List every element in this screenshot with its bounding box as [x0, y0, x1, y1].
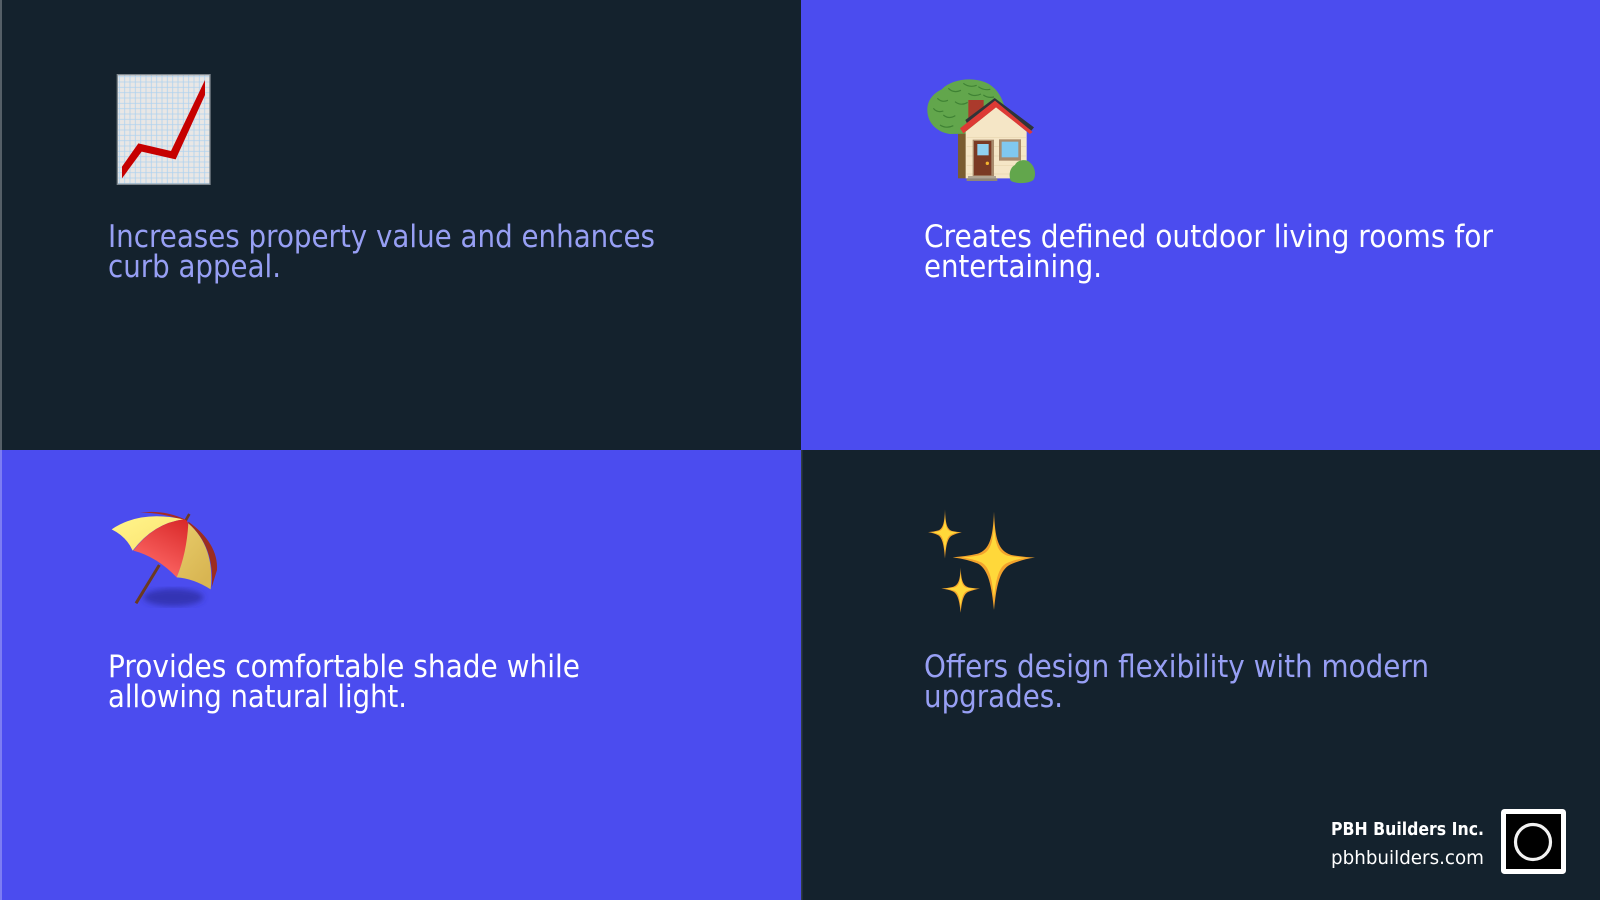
text: property value benefit: curb appeal.	[108, 249, 281, 285]
bush	[1010, 160, 1035, 183]
text: property value benefit: Increases property value and enhances	[108, 219, 655, 255]
text: shade benefit: Provides comfortable shade while	[108, 649, 580, 685]
icon: beach umbrella	[112, 512, 217, 606]
tree crown	[927, 79, 1004, 134]
panel: design flexibility	[801, 450, 1600, 900]
panel: outdoor living rooms	[801, 0, 1600, 450]
icon: sparkles	[928, 509, 1035, 613]
icon: chart with upward trend	[117, 74, 211, 185]
text: shade benefit: allowing natural light.	[108, 679, 407, 715]
panel: property value	[0, 0, 801, 450]
text: design flexibility benefit: upgrades.	[924, 679, 1063, 715]
footer: company name and website: PBH Builders Inc.	[1331, 819, 1484, 840]
footer: company name and website: pbhbuilders.com	[1331, 847, 1484, 869]
text: design flexibility benefit	[924, 649, 1429, 715]
footer: company name and website	[1331, 819, 1484, 869]
panel: comfortable shade	[0, 450, 801, 900]
text: shade benefit	[108, 649, 580, 715]
text: outdoor living benefit: entertaining.	[924, 249, 1102, 285]
text: property value benefit	[108, 219, 655, 285]
logo	[1501, 809, 1566, 874]
icon: house with tree	[927, 79, 1035, 183]
text: outdoor living benefit	[924, 219, 1493, 285]
text: design flexibility benefit: Offers design flexibility with modern	[924, 649, 1429, 685]
text: outdoor living benefit: Creates defined outdoor living rooms for	[924, 219, 1493, 255]
